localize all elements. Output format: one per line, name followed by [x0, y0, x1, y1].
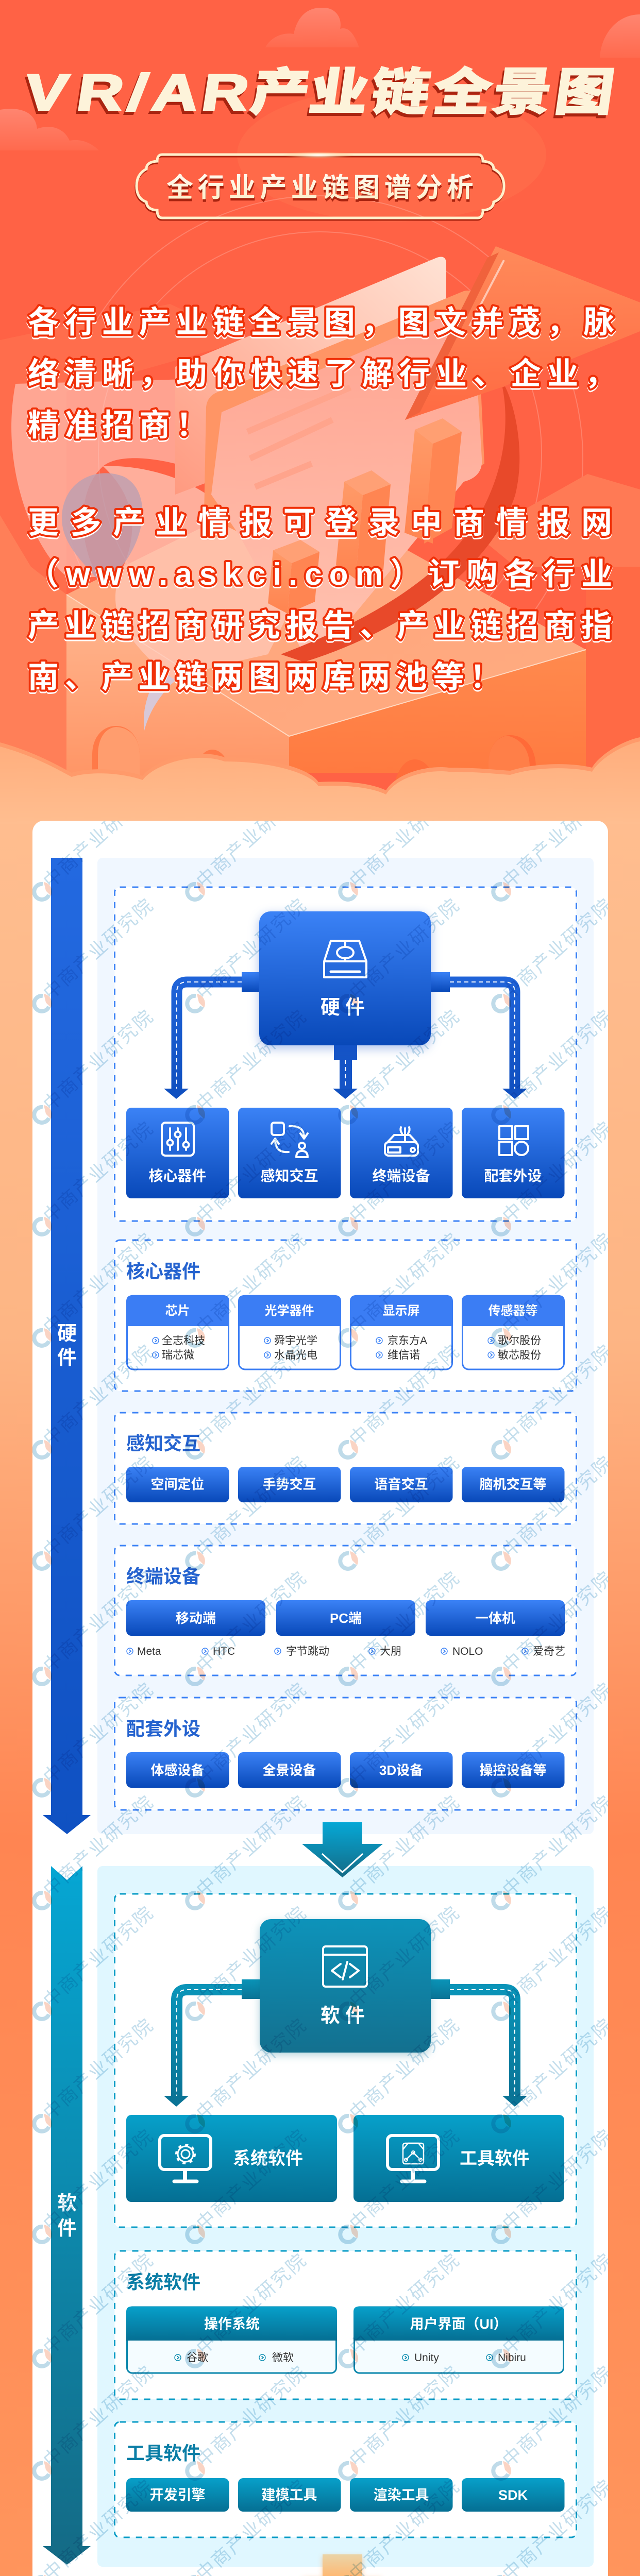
watermark overlay: 中商产业研究院: [192, 782, 311, 892]
vendor list: HTC: [213, 1646, 235, 1657]
buttons: PC端: [330, 1611, 362, 1626]
heading: 工具软件: [126, 2443, 200, 2464]
watermark overlay: 中商产业研究院: [345, 1791, 464, 1901]
watermark overlay: 中商产业研究院: [192, 2249, 311, 2359]
isometric base box: [66, 484, 586, 788]
card: sensors: 歌尔股份: [498, 1335, 541, 1347]
card: operating systems: 谷歌: [187, 2352, 208, 2364]
hardware overview box: [114, 887, 576, 1221]
hardware panel background: [97, 858, 594, 1834]
buttons: 操控设备等: [479, 1762, 547, 1778]
buttons: 空间定位: [150, 1477, 205, 1492]
watermark overlay: 中商产业研究院: [498, 2014, 617, 2124]
section: software: [43, 1866, 594, 2567]
watermark overlay: 中商产业研究院: [498, 2125, 617, 2234]
card: displays: 维信诺: [388, 1349, 420, 1361]
card: sensors: 敏芯股份: [498, 1349, 541, 1361]
sensing interaction block: [114, 1413, 576, 1524]
watermark overlay: 中商产业研究院: [39, 1791, 158, 1901]
terminal devices block: [114, 1546, 576, 1675]
left connector arrow: [164, 1979, 260, 2107]
tile: peripherals: 配套外设: [484, 1168, 542, 1184]
buttons: 一体机: [475, 1611, 515, 1626]
paper scroll: [11, 379, 289, 731]
card: optics: 光学器件: [265, 1304, 314, 1318]
watermark overlay: 中商产业研究院: [39, 2249, 158, 2359]
vendor list: 大朋: [380, 1646, 401, 1657]
watermark overlay: 中商产业研究院: [345, 1228, 464, 1338]
tile: tool software: 工具软件: [460, 2149, 530, 2168]
tile: sensing interaction: 感知交互: [260, 1168, 318, 1184]
vendor list: NOLO: [452, 1646, 483, 1657]
hardware vertical arrow: [43, 858, 91, 1834]
watermark overlay: 中商产业研究院: [345, 1340, 464, 1450]
right connector arrow: [430, 1979, 527, 2107]
buttons: 脑机交互等: [479, 1477, 547, 1492]
hardware vertical label: 硬: [57, 1323, 77, 1345]
decorative circles: [57, 196, 583, 721]
watermark overlay: 中商产业研究院: [345, 2249, 464, 2359]
buttons: 全景设备: [262, 1762, 316, 1778]
hardware main box: [259, 911, 431, 1045]
dashed frame: [114, 887, 576, 1221]
title: [19, 64, 618, 124]
arrow: software to content: [302, 2554, 383, 2576]
intro text: [28, 305, 621, 694]
dashed frame: [114, 1546, 576, 1675]
card: optics: 舜宇光学: [274, 1335, 317, 1347]
buttons: SDK: [498, 2487, 528, 2503]
watermark overlay: 中商产业研究院: [39, 782, 158, 892]
watermark overlay: 中商产业研究院: [498, 2361, 617, 2471]
buttons: [126, 1600, 565, 1636]
watermark overlay: 中商产业研究院: [345, 2014, 464, 2124]
watermark overlay: 中商产业研究院: [39, 1678, 158, 1788]
watermark overlay: 中商产业研究院: [345, 1567, 464, 1676]
intro text: 精准招商！: [28, 408, 213, 443]
side buildings: [0, 304, 640, 773]
watermark overlay: 中商产业研究院: [192, 2361, 311, 2471]
dashed frame: [114, 1240, 576, 1391]
dashed frame: [114, 2251, 576, 2399]
dashed frame: [114, 1894, 576, 2227]
watermark overlay: 中商产业研究院: [498, 1005, 617, 1115]
card: user interface: [353, 2307, 564, 2373]
watermark overlay: 中商产业研究院: [39, 2361, 158, 2471]
intro text: 络清晰，助你快速了解行业、企业，: [28, 357, 621, 391]
subtitle shadow: 全行业产业链图谱分析: [167, 176, 478, 206]
3D bar chart: [268, 418, 462, 614]
watermark overlay: 中商产业研究院: [345, 1902, 464, 2011]
watermark overlay: 中商产业研究院: [39, 2014, 158, 2124]
watermark overlay: 中商产业研究院: [498, 1340, 617, 1450]
watermark overlay: 中商产业研究院: [192, 1117, 311, 1227]
core components block: [114, 1240, 576, 1391]
software vertical label: [57, 2193, 77, 2240]
watermark overlay: 中商产业研究院: [498, 782, 617, 892]
card: sensors: 传感器等: [489, 1303, 538, 1318]
watermark overlay: 中商产业研究院: [192, 2125, 311, 2234]
watermark overlay: [34, 782, 617, 2576]
ribbon flare: [282, 151, 355, 159]
watermark overlay: 中商产业研究院: [39, 1340, 158, 1450]
tile: core components: [126, 1108, 229, 1198]
dashed frame: [114, 1413, 576, 1524]
software main box: [260, 1919, 431, 2053]
buttons: 手势交互: [262, 1477, 316, 1492]
title shadow: VR/AR: [19, 67, 250, 124]
report sheet: [175, 257, 484, 654]
watermark overlay: 中商产业研究院: [192, 894, 311, 1004]
card: user interface: 用户界面（UI）: [410, 2316, 507, 2332]
buttons: [126, 1752, 565, 1788]
buttons: [126, 2478, 565, 2512]
glow behind ribbon: [237, 88, 546, 222]
arrow: hardware to software: [302, 1822, 383, 1877]
title text: 产业链全景图: [247, 64, 618, 121]
vendor list: Meta: [137, 1646, 161, 1657]
subtitle text: 全行业产业链图谱分析: [166, 173, 478, 203]
watermark overlay: 中商产业研究院: [498, 1791, 617, 1901]
intro text: 更多产业情报可登录中商情报网: [28, 505, 612, 540]
ribbon frame: [136, 155, 504, 219]
watermark overlay: 中商产业研究院: [498, 894, 617, 1004]
buttons: 语音交互: [374, 1477, 428, 1492]
watermark overlay: 中商产业研究院: [498, 1228, 617, 1338]
intro text: 各行业产业链全景图，图文并茂，脉: [28, 305, 614, 340]
watermark overlay: 中商产业研究院: [345, 1117, 464, 1227]
growth arrow swoosh: [281, 246, 640, 662]
foreground clouds: [0, 737, 640, 824]
card: user interface: Unity: [414, 2352, 439, 2364]
hardware vertical label: 件: [57, 1347, 77, 1369]
watermark overlay: 中商产业研究院: [192, 2014, 311, 2124]
watermark overlay: 中商产业研究院: [498, 1451, 617, 1561]
software title: 软件: [321, 2005, 370, 2027]
buttons: 体感设备: [150, 1762, 205, 1778]
section: hardware: [43, 858, 594, 1834]
card: displays: 京东方A: [388, 1335, 427, 1347]
heading: 系统软件: [126, 2272, 200, 2293]
software vertical label: 软: [57, 2193, 77, 2214]
white card: [32, 821, 608, 2576]
card: displays: [350, 1295, 453, 1369]
tile: core components: 核心器件: [148, 1168, 207, 1184]
watermark overlay: 中商产业研究院: [498, 1117, 617, 1227]
tile: peripherals: [462, 1108, 565, 1198]
intro text: 南、产业链两图两库两池等！: [28, 660, 507, 694]
peripherals block: [114, 1698, 576, 1810]
watermark overlay: 中商产业研究院: [498, 2249, 617, 2359]
card: chips: 芯片: [165, 1304, 190, 1318]
software vertical arrow: [43, 1866, 91, 2565]
watermark overlay: 中商产业研究院: [192, 1567, 311, 1676]
heading: 核心器件: [126, 1261, 200, 1282]
watermark overlay: 中商产业研究院: [192, 1902, 311, 2011]
tile: system software: 系统软件: [233, 2149, 303, 2168]
card: optics: [238, 1295, 341, 1369]
hardware title: 硬件: [321, 997, 370, 1019]
card: user interface: Nibiru: [498, 2352, 526, 2364]
buttons: 开发引擎: [149, 2487, 205, 2503]
subtitle ribbon: [136, 151, 504, 219]
watermark overlay: 中商产业研究院: [39, 1005, 158, 1115]
vendor list: 爱奇艺: [533, 1646, 565, 1657]
tile: terminal devices: 终端设备: [372, 1168, 430, 1184]
card: operating systems: [126, 2307, 337, 2373]
title text: [21, 64, 618, 121]
buttons: 3D设备: [379, 1762, 423, 1778]
buttons: 建模工具: [262, 2487, 317, 2503]
watermark overlay: 中商产业研究院: [498, 1902, 617, 2011]
heading: 配套外设: [126, 1718, 200, 1739]
icon: code window: [323, 1946, 367, 1987]
watermark overlay: 中商产业研究院: [345, 1678, 464, 1788]
software vertical label: 件: [57, 2218, 77, 2240]
software overview box: [114, 1894, 576, 2227]
intro text: （www.askci.com）订购各行业: [28, 557, 612, 591]
vendor list: 字节跳动: [286, 1646, 329, 1657]
watermark overlay: 中商产业研究院: [345, 1005, 464, 1115]
heading: 感知交互: [126, 1433, 200, 1454]
card: operating systems: 微软: [272, 2352, 294, 2364]
watermark overlay: 中商产业研究院: [345, 782, 464, 892]
header banner: [0, 0, 640, 824]
watermark overlay: 中商产业研究院: [192, 1228, 311, 1338]
buttons: 移动端: [176, 1611, 216, 1626]
watermark overlay: 中商产业研究院: [39, 894, 158, 1004]
software panel background: [97, 1866, 594, 2567]
card: optics: 水晶光电: [274, 1349, 317, 1361]
buttons: 渲染工具: [373, 2487, 429, 2503]
card: displays: 显示屏: [382, 1304, 419, 1318]
watermark overlay: 中商产业研究院: [345, 1451, 464, 1561]
tile: sensing interaction: [238, 1108, 341, 1198]
card: operating systems: 操作系统: [204, 2316, 260, 2332]
card: chips: 瑞芯微: [162, 1349, 194, 1361]
watermark overlay: 中商产业研究院: [192, 1451, 311, 1561]
system software block: [114, 2251, 576, 2399]
card: chips: [126, 1295, 229, 1369]
watermark overlay: 中商产业研究院: [192, 1340, 311, 1450]
hardware vertical label: [57, 1323, 77, 1369]
card: chips: 全志科技: [162, 1335, 205, 1347]
watermark overlay: 中商产业研究院: [39, 1567, 158, 1676]
watermark overlay: 中商产业研究院: [39, 1117, 158, 1227]
left connector arrow: [164, 972, 260, 1099]
centre connector arrow: [333, 1043, 358, 1099]
right connector arrow: [430, 972, 527, 1099]
watermark overlay: 中商产业研究院: [39, 2125, 158, 2234]
watermark overlay: 中商产业研究院: [192, 1791, 311, 1901]
title shadow: 产业链全景图: [245, 67, 616, 124]
watermark overlay: 中商产业研究院: [39, 1902, 158, 2011]
watermark overlay: 中商产业研究院: [192, 1005, 311, 1115]
watermark overlay: 中商产业研究院: [39, 1228, 158, 1338]
tile: tool software: [353, 2115, 564, 2202]
watermark overlay: 中商产业研究院: [345, 2125, 464, 2234]
watermark overlay: 中商产业研究院: [498, 1678, 617, 1788]
tile: system software: [126, 2115, 337, 2202]
tool software block: [114, 2422, 576, 2537]
buttons: [126, 1467, 565, 1502]
watermark overlay: 中商产业研究院: [498, 1567, 617, 1676]
card: sensors: [462, 1295, 565, 1369]
watermark overlay: 中商产业研究院: [39, 1451, 158, 1561]
watermark overlay: 中商产业研究院: [345, 2361, 464, 2471]
vendor list: [127, 1646, 565, 1657]
dashed frame: [114, 2422, 576, 2537]
tile: terminal devices: [350, 1108, 452, 1198]
background clouds: [0, 8, 640, 150]
title text: VR/AR: [21, 64, 252, 121]
heading: 终端设备: [126, 1566, 200, 1587]
icon: hard drive: [324, 941, 366, 977]
title shadow: [19, 67, 616, 124]
intro text: 产业链招商研究报告、产业链招商指: [28, 608, 612, 643]
watermark overlay: 中商产业研究院: [345, 894, 464, 1004]
watermark overlay: 中商产业研究院: [192, 1678, 311, 1788]
header base colour: [0, 0, 640, 804]
dashed frame: [114, 1698, 576, 1810]
